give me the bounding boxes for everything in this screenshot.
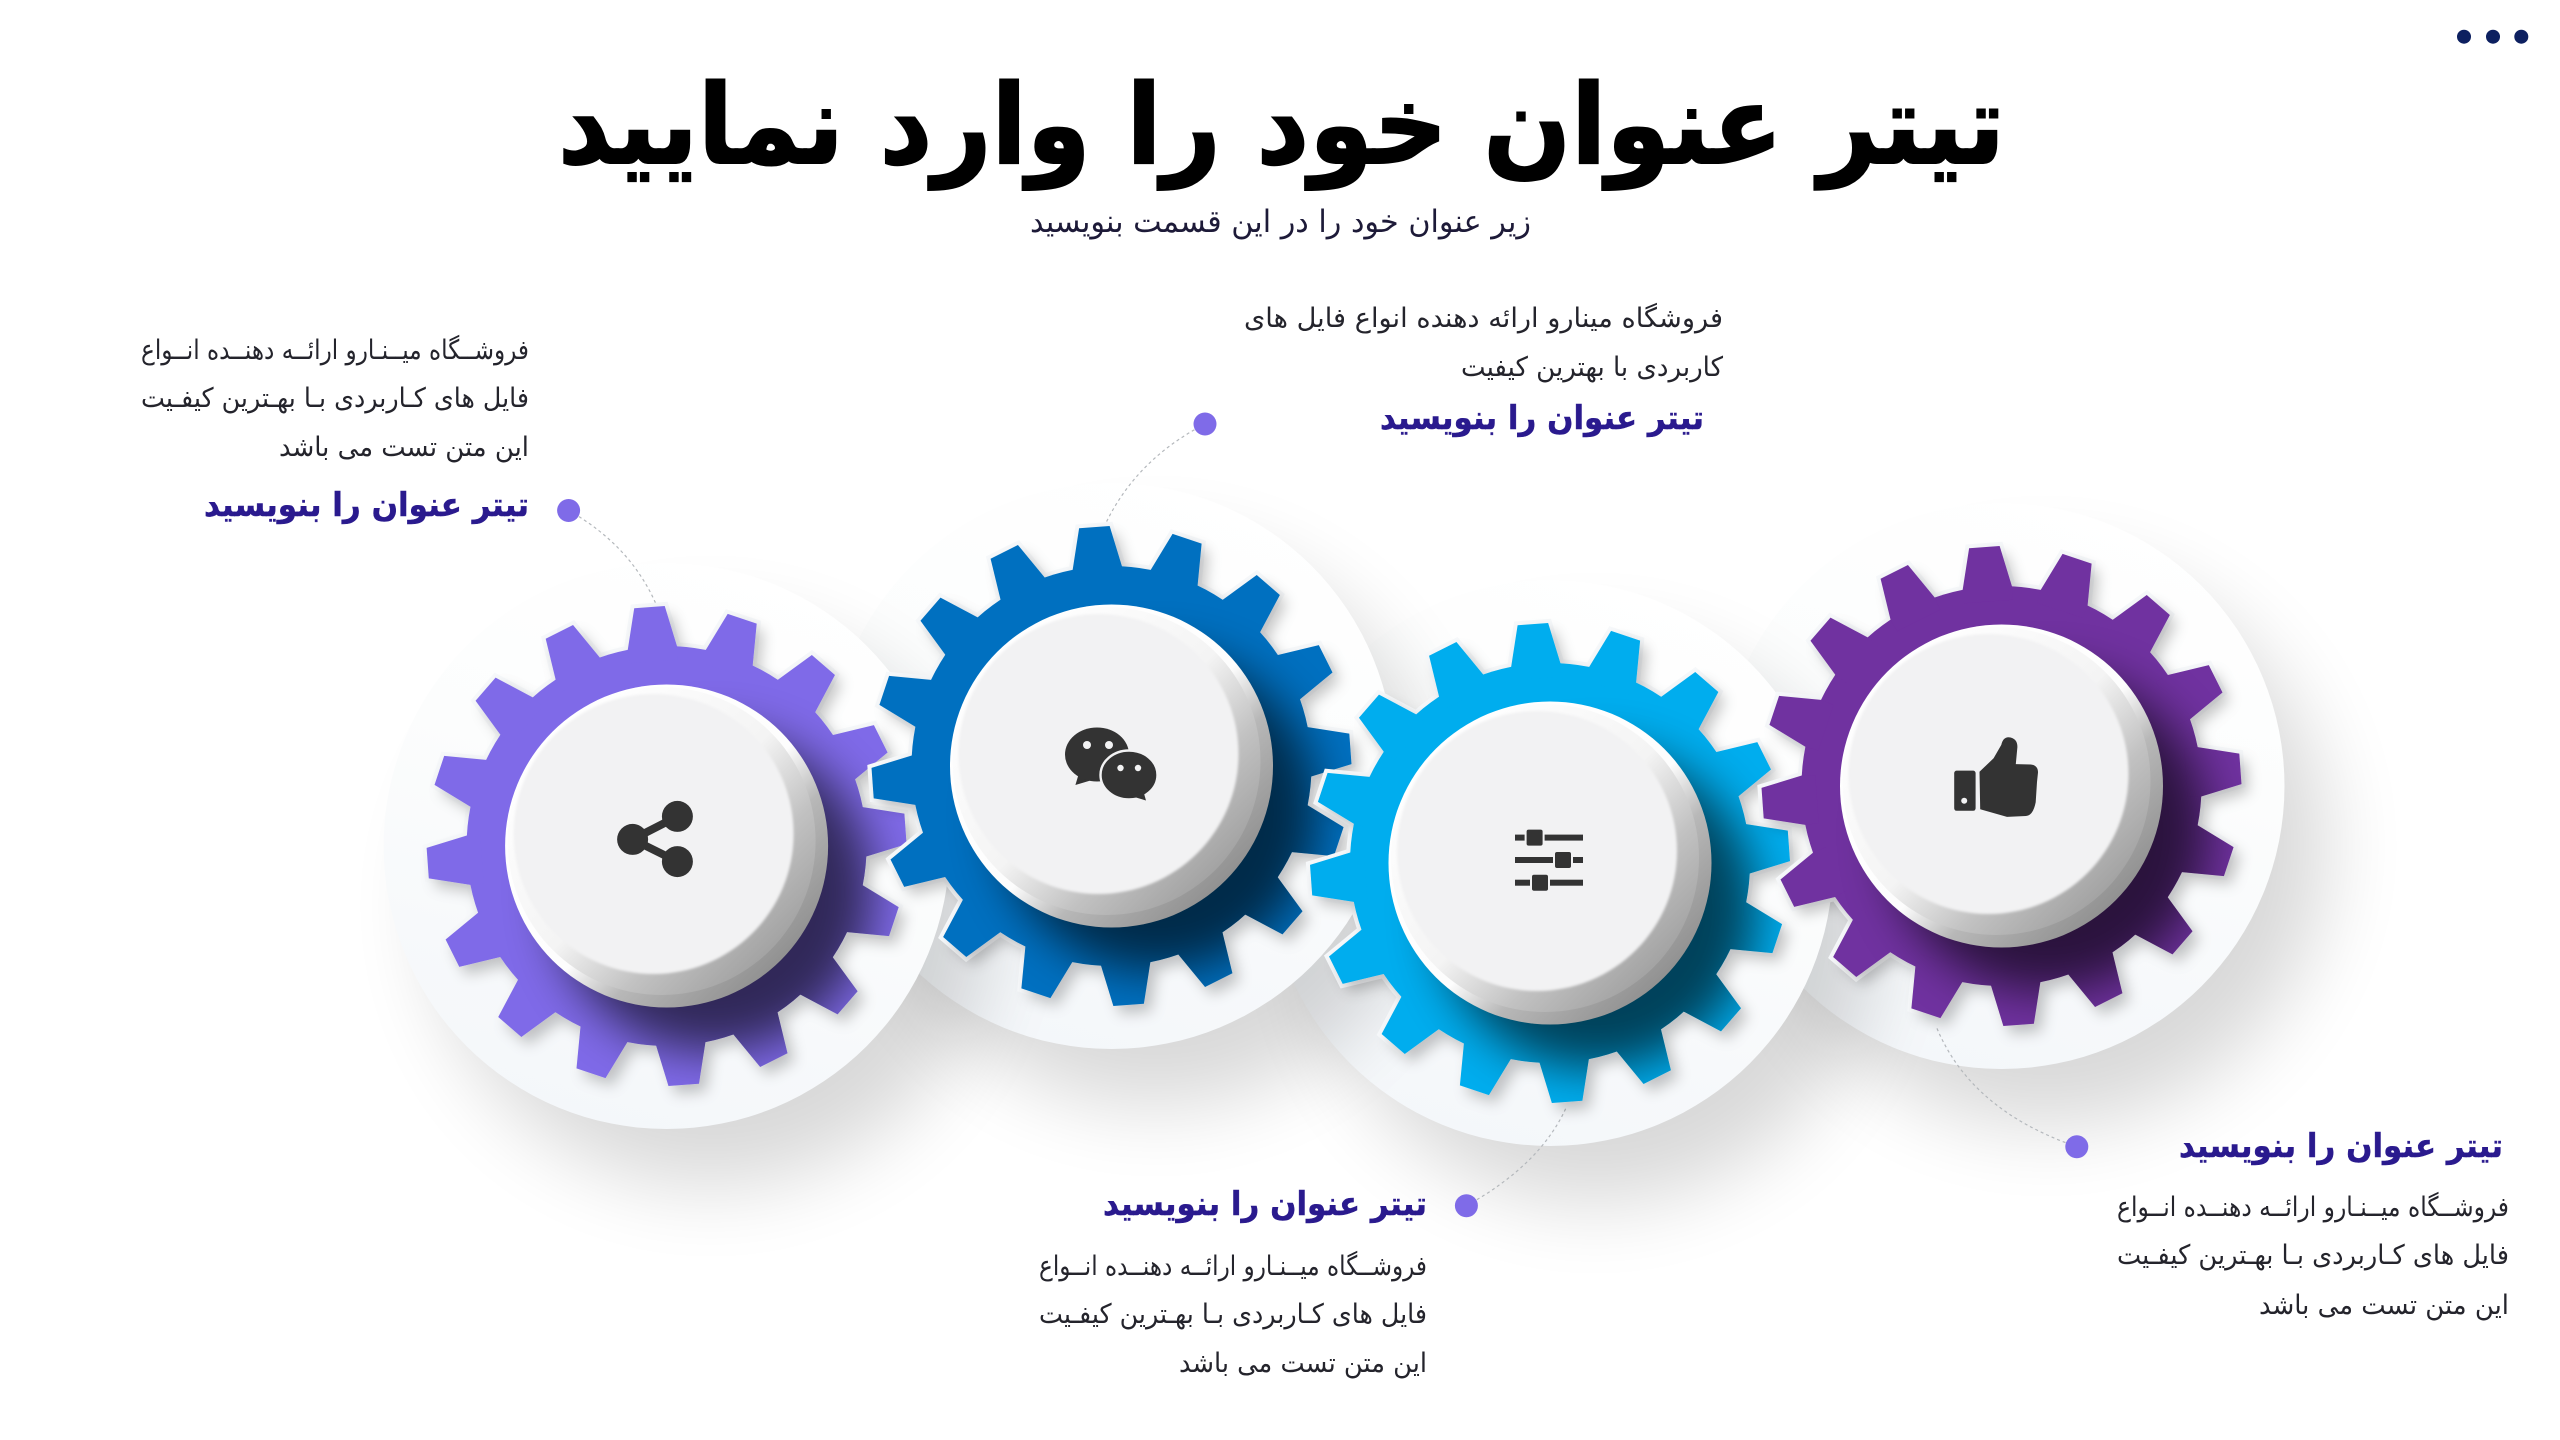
callout 2 body bbox=[1244, 302, 1723, 383]
disc and shadow: step 4 bbox=[1718, 503, 2326, 1126]
callout 1 heading: تیتر عنوان را بنویسید bbox=[204, 485, 529, 525]
disc and shadow: step 2 bbox=[828, 483, 1436, 1106]
callout 1 body: فروشــگاه میــنـارو ارائــه دهنــده انــواع bbox=[141, 334, 529, 366]
gear 3: sliders bbox=[1309, 622, 1791, 1104]
connector line 2 bbox=[1104, 424, 1205, 527]
callout 3 body: فایل های کـاربردی بـا بهـترین کیفـیت bbox=[1039, 1299, 1427, 1330]
callout 3 bbox=[1039, 1184, 1478, 1379]
icon: thumbs up bbox=[1954, 737, 2038, 817]
callout 4 body: فروشــگاه میــنـارو ارائــه دهنــده انــواع bbox=[2117, 1191, 2509, 1223]
callout 3 body: فروشــگاه میــنـارو ارائــه دهنــده انــواع bbox=[1039, 1250, 1427, 1282]
callout 3 body: این متن تست می باشد bbox=[1179, 1348, 1427, 1379]
callout 4 heading: تیتر عنوان را بنویسید bbox=[2179, 1126, 2503, 1166]
callout 2 body: فروشگاه مینارو ارائه دهنده انواع فایل های bbox=[1244, 302, 1723, 334]
icon: share bbox=[617, 801, 693, 877]
callout 4 bbox=[2065, 1126, 2509, 1321]
callout 4 body bbox=[2117, 1191, 2509, 1321]
connector line 3 bbox=[1466, 1108, 1566, 1206]
callout 1 body: فایل های کـاربردی بـا بهـترین کیفـیت bbox=[141, 383, 529, 414]
menu dots bbox=[2457, 30, 2528, 44]
callout 2 bbox=[1194, 302, 1723, 438]
gear 2: chat bbox=[871, 525, 1352, 1007]
callout 1 body: این متن تست می باشد bbox=[279, 432, 529, 463]
gear 4: thumbs up bbox=[1761, 545, 2242, 1027]
gear 1: share bbox=[426, 605, 907, 1087]
callout 4 marker bbox=[2065, 1135, 2088, 1158]
disc and shadow: step 3 bbox=[1267, 580, 1875, 1203]
callout 4 body: فایل های کـاربردی بـا بهـترین کیفـیت bbox=[2117, 1240, 2509, 1271]
disc and shadow: step 1 bbox=[384, 563, 991, 1186]
callout 2 marker bbox=[1194, 412, 1216, 436]
callout 2 heading: تیتر عنوان را بنویسید bbox=[1380, 398, 1704, 438]
callout 1 marker bbox=[557, 499, 580, 522]
connector line 1 bbox=[569, 510, 656, 604]
title: تیتر عنوان خود را وارد نمایید bbox=[558, 61, 2005, 190]
callout 3 heading: تیتر عنوان را بنویسید bbox=[1103, 1184, 1427, 1224]
callout 3 marker bbox=[1455, 1194, 1478, 1217]
subtitle: زیر عنوان خود را در این قسمت بنویسید bbox=[1030, 204, 1531, 240]
icon: sliders bbox=[1515, 829, 1583, 892]
callout 1 bbox=[141, 334, 580, 525]
callout 2 body: کاربردی با بهترین کیفیت bbox=[1461, 352, 1723, 383]
icon: chat bubbles bbox=[1065, 728, 1158, 800]
callout 4 body: این متن تست می باشد bbox=[2259, 1290, 2509, 1321]
callout 1 body bbox=[141, 334, 529, 463]
callout 3 body bbox=[1039, 1250, 1427, 1379]
connector line 4 bbox=[1936, 1026, 2077, 1147]
